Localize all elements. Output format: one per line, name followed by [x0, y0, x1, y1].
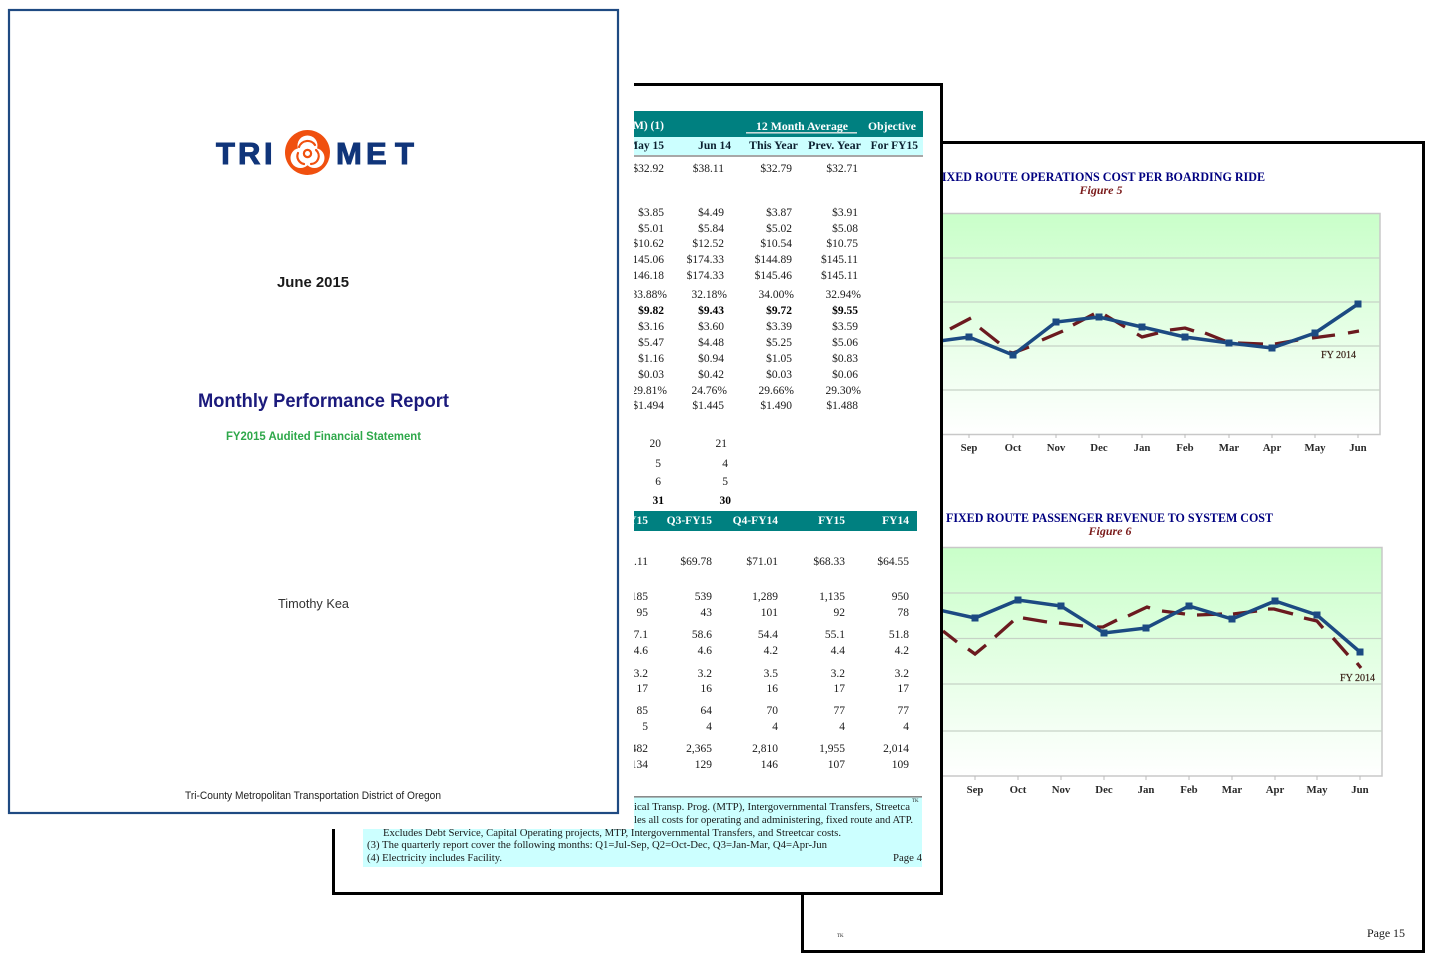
table body: quarterly rows: 17	[834, 683, 845, 695]
table body: monthly cost rows: $4.49	[698, 206, 724, 219]
table body: quarterly rows: 77	[898, 705, 909, 717]
chart title: FIXED ROUTE OPERATIONS COST PER BOARDING RIDE	[934, 170, 1265, 184]
table body: quarterly rows: 3.2	[634, 668, 648, 680]
table body: quarterly rows: 950	[892, 591, 909, 603]
table body: count rows: 6	[655, 476, 661, 488]
table body: monthly cost rows: 24.76%	[692, 385, 727, 397]
table body: monthly cost rows: $0.42	[698, 368, 724, 381]
table body: quarterly rows: 101	[761, 607, 778, 619]
table body: monthly cost rows: 29.81%	[632, 385, 667, 397]
table header: monthly and average columns: For FY15	[871, 140, 918, 152]
table header: quarterly columns: Q3-FY15	[667, 515, 712, 527]
table body: quarterly rows: 5	[642, 721, 648, 733]
table body: count rows: 5	[655, 458, 661, 470]
table body: count rows: 20	[650, 438, 661, 450]
table body: quarterly rows: 3.5	[764, 668, 778, 680]
table body: monthly cost rows: $1.488	[826, 399, 858, 412]
footnotes: (3) The quarterly report cover the following months: Q1=Jul-Sep, Q2=Oct-Dec, Q3=Jan-Mar, Q4=Apr-Jun	[367, 839, 827, 851]
table body: monthly cost rows: 34.00%	[759, 289, 794, 301]
month axis labels: Jan	[1138, 784, 1154, 796]
table body: quarterly rows: 4	[772, 721, 778, 733]
table body: quarterly rows: 64	[700, 705, 712, 717]
table body: quarterly rows: 3.2	[895, 668, 909, 680]
table body: quarterly rows: 1,955	[819, 743, 845, 755]
table body: monthly cost rows: $5.02	[766, 222, 792, 235]
table body: monthly cost rows: $3.39	[766, 320, 792, 333]
table body: quarterly rows: 2,482	[622, 743, 648, 755]
logo: TriMet: R	[238, 136, 260, 171]
cover agency line: Tri-County Metropolitan Transportation District of Oregon	[185, 790, 441, 802]
table body: monthly cost rows: $9.72	[766, 304, 792, 317]
table body: monthly cost rows: $10.62	[632, 237, 664, 250]
table body: monthly cost rows: $3.16	[638, 320, 664, 333]
table body: monthly cost rows: $5.01	[638, 222, 664, 235]
month axis labels: Jun	[1351, 784, 1369, 796]
table body: count rows: 30	[720, 495, 731, 507]
table body: monthly cost rows: 32.18%	[692, 289, 727, 301]
table body: monthly cost rows: $145.06	[627, 253, 664, 266]
month axis labels: Apr	[1266, 784, 1284, 796]
table body: count rows: 31	[652, 495, 664, 507]
line: FY 2014 dashed series	[950, 314, 1359, 353]
tiny initials: TK	[837, 934, 844, 939]
footnotes: ical Transp. Prog. (MTP), Intergovernmental Transfers, Streetca	[634, 801, 910, 813]
footnotes: (4) Electricity includes Facility.	[367, 852, 502, 864]
month axis labels: Sep	[967, 784, 983, 796]
panel: middle page with data table	[334, 84, 942, 894]
line: FY 2015 solid series	[925, 300, 1362, 358]
figure caption: Figure 5	[1078, 183, 1123, 197]
figure caption: Figure 6	[1087, 524, 1132, 538]
table body: monthly cost rows: 29.30%	[826, 385, 861, 397]
table body: monthly cost rows: $0.94	[698, 352, 724, 365]
table body: quarterly rows: 4	[706, 721, 712, 733]
month axis labels: Mar	[1219, 442, 1239, 454]
table body: quarterly rows: 58.6	[692, 629, 712, 641]
table body: quarterly rows: 4	[839, 721, 845, 733]
table header: monthly and average columns: May 15	[627, 140, 664, 152]
series label: FY 2014	[1340, 673, 1376, 684]
table header: monthly and average columns: 12 Month Average	[756, 121, 848, 133]
table body: quarterly rows: $71.01	[746, 555, 778, 568]
table header: monthly and average columns: Jun 14	[698, 140, 731, 152]
chart title: FIXED ROUTE PASSENGER REVENUE TO SYSTEM COST	[946, 511, 1274, 525]
footnote box background	[363, 797, 922, 867]
table body: monthly cost rows: $9.55	[832, 304, 858, 317]
month axis labels: Nov	[1047, 442, 1066, 454]
table body: quarterly rows: 1,135	[819, 591, 845, 603]
logo: TriMet: T	[216, 136, 235, 171]
month axis labels: Feb	[1180, 784, 1198, 796]
table body: quarterly rows: 1,185	[622, 591, 648, 603]
table body: monthly cost rows: $0.03	[766, 368, 792, 381]
table body: quarterly rows	[617, 555, 909, 771]
table body: monthly cost rows: $145.11	[821, 253, 858, 266]
table body: monthly cost rows: $0.06	[832, 368, 858, 381]
table body: quarterly rows: 3.2	[831, 668, 845, 680]
table header: quarterly columns: Q4-FY14	[733, 515, 778, 527]
table body: monthly cost rows: $145.46	[755, 269, 792, 282]
table body: monthly cost rows: $4.48	[698, 336, 724, 349]
table body: monthly cost rows: $174.33	[687, 253, 724, 266]
month axis labels: Nov	[1052, 784, 1071, 796]
table body: quarterly rows: 92	[834, 607, 845, 619]
table body: quarterly rows: 4.2	[764, 645, 778, 657]
table body: monthly cost rows: $9.82	[638, 304, 664, 317]
month axis labels: Oct	[1010, 784, 1027, 796]
table body: count rows: 4	[722, 458, 728, 470]
footnotes: Excludes Debt Service, Capital Operating projects, MTP, Intergovernmental Transfers, and Streetcar costs.	[383, 827, 841, 839]
table body: quarterly rows: 2,810	[752, 743, 778, 755]
table body: quarterly rows: $68.33	[813, 555, 845, 568]
month axis labels: May	[1304, 442, 1326, 454]
table body: monthly cost rows: $12.52	[692, 237, 724, 250]
table body: monthly cost rows: $144.89	[755, 253, 792, 266]
month axis labels: Dec	[1090, 442, 1108, 454]
table body: quarterly rows: 4.2	[895, 645, 909, 657]
table body: monthly cost rows: $5.47	[638, 336, 664, 349]
table body: quarterly rows: 16	[700, 683, 712, 695]
table body: monthly cost rows: $10.75	[826, 237, 858, 250]
logo: TriMet: I	[264, 136, 273, 171]
table body: monthly cost rows: $1.490	[760, 399, 792, 412]
table body: monthly cost rows: $3.60	[698, 320, 724, 333]
table body: quarterly rows: 1,289	[752, 591, 778, 603]
table body: monthly cost rows: $0.03	[638, 368, 664, 381]
table body: quarterly rows: 54.4	[758, 629, 778, 641]
table body: quarterly rows: $71.11	[617, 555, 648, 568]
table body: monthly cost rows: $145.11	[821, 269, 858, 282]
table body: count rows: 21	[716, 438, 727, 450]
month axis labels: Sep	[961, 442, 977, 454]
table body: monthly cost rows: $5.08	[832, 222, 858, 235]
table body: monthly cost rows: $5.06	[832, 336, 858, 349]
table body: monthly cost rows: $1.445	[692, 399, 724, 412]
table body: monthly cost rows: $10.54	[760, 237, 792, 250]
table body: quarterly rows: 17	[898, 683, 909, 695]
footnotes	[367, 796, 922, 864]
table header: quarterly columns	[603, 511, 917, 531]
month axis labels: Mar	[1222, 784, 1242, 796]
logo: TriMet: T	[395, 136, 414, 171]
table body: monthly cost rows: 32.94%	[826, 289, 861, 301]
table body: monthly cost rows	[627, 162, 861, 412]
cover author: Timothy Kea	[278, 596, 350, 611]
month axis labels	[967, 786, 1368, 796]
table header: quarterly columns: FY15	[818, 515, 845, 527]
table body: quarterly rows: 77	[834, 705, 845, 717]
table body: monthly cost rows: $3.85	[638, 206, 664, 219]
chart: fixed route passenger revenue to system cost	[930, 511, 1382, 796]
table body: quarterly rows: 2,014	[883, 743, 909, 755]
cover title: Monthly Performance Report	[198, 391, 450, 412]
month axis labels: Jun	[1349, 442, 1367, 454]
month axis labels	[961, 444, 1366, 454]
page number 15: Page 15	[1367, 926, 1405, 940]
table body: quarterly rows: 4.4	[831, 645, 845, 657]
table body: quarterly rows: 78	[898, 607, 909, 619]
table body: quarterly rows: 146	[761, 759, 778, 771]
table body: quarterly rows: 3.2	[698, 668, 712, 680]
table body: quarterly rows: 43	[700, 607, 712, 619]
table body: monthly cost rows: $146.18	[627, 269, 664, 282]
footnotes: les all costs for operating and administering, fixed route and ATP.	[634, 814, 913, 826]
line: FY 2015 solid series	[930, 596, 1364, 656]
table body: monthly cost rows: $5.25	[766, 336, 792, 349]
white mask between cover and middle page	[325, 75, 634, 829]
table body: monthly cost rows: $32.79	[760, 162, 792, 175]
table body: monthly cost rows: $1.16	[638, 352, 664, 365]
table body: quarterly rows: 55.1	[825, 629, 845, 641]
plot area	[930, 214, 1380, 434]
table body: monthly cost rows: $3.91	[832, 206, 858, 219]
footnotes: TK	[912, 799, 919, 804]
table body: monthly cost rows: $9.43	[698, 304, 724, 317]
table body: quarterly rows: 70	[766, 705, 778, 717]
table body: quarterly rows: 17	[636, 683, 648, 695]
table body: quarterly rows: 4.6	[698, 645, 712, 657]
panel: cover page	[9, 10, 618, 813]
icon: orange swirl circle	[285, 130, 330, 175]
table body: quarterly rows: 2,365	[686, 743, 712, 755]
table body: monthly cost rows: $3.87	[766, 206, 792, 219]
table header: monthly and average columns: M) (1)	[633, 120, 664, 132]
footnotes: Page 4	[893, 852, 922, 864]
table header: monthly and average columns: This Year	[749, 140, 798, 152]
table body: monthly cost rows: $0.83	[832, 352, 858, 365]
table body: quarterly rows: 109	[892, 759, 909, 771]
chart: fixed route operations cost per boarding ride	[925, 170, 1380, 454]
table body: monthly cost rows: $174.33	[687, 269, 724, 282]
table body: monthly cost rows: $1.494	[632, 399, 664, 412]
logo: TriMet: M	[336, 136, 362, 171]
table body: monthly cost rows: $32.92	[632, 162, 664, 175]
table body: monthly cost rows: $32.71	[826, 162, 858, 175]
month axis labels: Jan	[1134, 442, 1150, 454]
panel: back page with charts	[802, 142, 1424, 952]
table body: quarterly rows: 129	[695, 759, 712, 771]
table body: monthly cost rows: $1.05	[766, 352, 792, 365]
logo: TriMet: E	[366, 136, 387, 171]
month axis labels: Oct	[1005, 442, 1022, 454]
table body: quarterly rows: $69.78	[680, 555, 712, 568]
logo: TriMet	[216, 130, 414, 175]
table header: monthly and average columns: Objective	[868, 121, 916, 133]
table body: monthly cost rows: $5.84	[698, 222, 724, 235]
cover date: June 2015	[277, 274, 349, 291]
month axis labels: Feb	[1176, 442, 1194, 454]
plot area	[930, 548, 1382, 776]
table header: monthly and average columns	[620, 111, 923, 157]
table body: monthly cost rows: $3.59	[832, 320, 858, 333]
table body: monthly cost rows: 33.88%	[632, 289, 667, 301]
table body: quarterly rows: $64.55	[877, 555, 909, 568]
table body: quarterly rows: 95	[636, 607, 648, 619]
table body: quarterly rows: 4	[903, 721, 909, 733]
table body: quarterly rows: 134	[631, 759, 648, 771]
table body: count rows: 5	[722, 476, 728, 488]
series label: FY 2014	[1321, 350, 1357, 361]
table body: quarterly rows: 16	[766, 683, 778, 695]
table body: monthly cost rows: 29.66%	[759, 385, 794, 397]
table body: quarterly rows: 85	[636, 705, 648, 717]
table header: monthly and average columns: Prev. Year	[808, 140, 861, 152]
table header: quarterly columns: FY14	[882, 515, 909, 527]
month axis labels: May	[1306, 784, 1328, 796]
table body: quarterly rows: 4.6	[634, 645, 648, 657]
month axis labels: Dec	[1095, 784, 1113, 796]
table body: quarterly rows: 57.1	[628, 629, 648, 641]
table body: count rows	[650, 438, 731, 507]
table header: quarterly columns: Q4-FY15	[603, 515, 648, 527]
table body: quarterly rows: 107	[828, 759, 845, 771]
table body: quarterly rows: 539	[695, 591, 712, 603]
cover subtitle: FY2015 Audited Financial Statement	[226, 429, 421, 443]
table body: monthly cost rows: $38.11	[693, 162, 724, 175]
line: FY 2014 dashed series	[943, 607, 1361, 668]
table body: quarterly rows: 51.8	[889, 629, 909, 641]
month axis labels: Apr	[1263, 442, 1281, 454]
